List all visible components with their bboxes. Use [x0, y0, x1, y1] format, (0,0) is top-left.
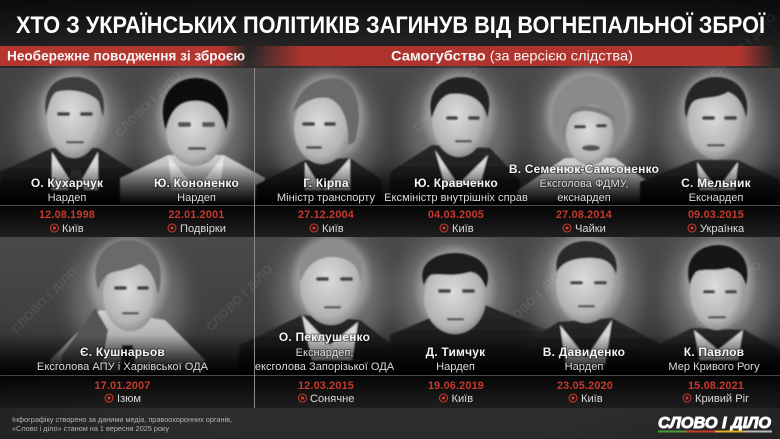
watermarks	[8, 10, 780, 336]
portrait: Г. Кірпа	[256, 70, 382, 205]
card: О. Кухарчук	[31, 176, 104, 235]
card: В. Семенюк-Самсоненко: Ексголова ФДМУ,	[540, 178, 628, 190]
footer background	[0, 408, 780, 439]
portrait: В. Давиденко	[510, 230, 662, 375]
card: В. Семенюк-Самсоненко: 27.08.2014	[556, 209, 612, 221]
footer note: «Слово і діло» станом на 1 вересня 2025 року	[12, 424, 169, 433]
card: О. Кухарчук: Нардеп	[48, 192, 86, 204]
header background	[0, 0, 780, 68]
section heading: Самогубство	[250, 46, 776, 66]
card: Д. Тимчук: 19.06.2019	[428, 380, 484, 392]
card: Ю. Кононенко	[154, 176, 239, 235]
bottom row fade	[0, 335, 780, 375]
footer note	[12, 415, 232, 433]
card: В. Семенюк-Самсоненко: Чайки	[575, 223, 606, 235]
card: Є. Кушнарьов: Ізюм	[117, 393, 141, 405]
watermarks: СЛОВО І ДІЛО	[8, 264, 81, 336]
portrait: В. Семенюк-Самсоненко	[518, 65, 660, 205]
card: К. Павлов: Мер Кривого Рогу	[668, 361, 760, 373]
card: Ю. Кравченко	[384, 176, 528, 235]
card: В. Семенюк-Самсоненко: екснардеп	[557, 192, 611, 204]
panel: top portrait row background	[0, 68, 780, 205]
card: В. Семенюк-Самсоненко: В. Семенюк-Самсоненко	[509, 162, 659, 176]
card: С. Мельник: С. Мельник	[681, 176, 752, 190]
watermarks: СЛОВО І ДІЛО	[707, 10, 780, 82]
card: Д. Тимчук: Д. Тимчук	[426, 345, 486, 359]
card: Ю. Кононенко: Подвірки	[180, 223, 226, 235]
section heading: Необережне поводження зі зброєю: Необережне поводження зі зброєю	[7, 48, 245, 64]
panel: bottom portrait row background	[0, 237, 780, 375]
card: В. Давиденко: Нардеп	[565, 361, 603, 373]
card: Є. Кушнарьов: Ексголова АПУ і Харківської ОДА	[37, 361, 209, 373]
card: С. Мельник	[681, 176, 752, 235]
card: Є. Кушнарьов: 17.01.2007	[94, 380, 151, 392]
card: О. Пеклушенко: 12.03.2015	[298, 380, 354, 392]
card: В. Давиденко: Київ	[581, 393, 603, 405]
card: С. Мельник: Екснардеп	[689, 192, 743, 204]
card: Ю. Кононенко: Нардеп	[177, 192, 216, 204]
watermarks: СЛОВО І ДІЛО	[410, 63, 483, 135]
card: К. Павлов: К. Павлов	[684, 345, 744, 359]
watermarks: СЛОВО І ДІЛО	[692, 258, 765, 330]
portrait: Ю. Кононенко	[120, 68, 265, 205]
card: О. Пеклушенко: Сонячне	[310, 393, 354, 405]
card: Д. Тимчук	[426, 345, 486, 405]
portrait: С. Мельник	[640, 70, 780, 205]
card: О. Кухарчук: Київ	[62, 223, 84, 235]
card: Г. Кірпа: Міністр транспорту	[277, 192, 376, 204]
card: К. Павлов: Кривий Ріг	[695, 393, 749, 405]
logo: Слово і діло: СЛОВО І ДІЛО	[658, 415, 771, 432]
card: Ю. Кравченко: Ю. Кравченко	[414, 176, 498, 190]
card: В. Давиденко	[543, 345, 625, 405]
card: О. Пеклушенко	[255, 330, 395, 405]
date strip: bottom row	[0, 375, 780, 408]
card: Ю. Кравченко: 04.03.2005	[428, 209, 484, 221]
card: К. Павлов	[668, 345, 760, 405]
card: Д. Тимчук: Нардеп	[436, 361, 475, 373]
section heading: Самогубство: Самогубство (за версією слідства)	[391, 48, 633, 64]
card: О. Пеклушенко: О. Пеклушенко	[279, 330, 370, 344]
watermarks: СЛОВО І ДІЛО	[497, 263, 570, 335]
card: Є. Кушнарьов	[37, 345, 209, 405]
card: В. Давиденко: В. Давиденко	[543, 345, 625, 359]
footer note: Інфографіку створено за даними медіа, правоохоронних органів,	[12, 415, 232, 424]
card: Ю. Кравченко: Ексміністр внутрішніх справ	[384, 192, 528, 204]
card: О. Кухарчук: 12.08.1998	[39, 209, 95, 221]
card: Г. Кірпа	[277, 176, 376, 235]
portrait: Ю. Кравченко	[390, 70, 520, 205]
card: Ю. Кравченко: Київ	[452, 223, 474, 235]
watermarks: СЛОВО І ДІЛО	[203, 262, 276, 334]
card: В. Давиденко: 23.05.2020	[557, 380, 613, 392]
date strip: top row	[0, 205, 780, 237]
card: С. Мельник: Українка	[700, 223, 745, 235]
portrait: О. Кухарчук	[0, 68, 133, 205]
watermarks: СЛОВО І ДІЛО	[112, 68, 185, 140]
portrait: Д. Тимчук	[390, 237, 547, 375]
card: Є. Кушнарьов: Є. Кушнарьов	[80, 345, 165, 359]
card: О. Пеклушенко: Екснардеп,	[296, 347, 353, 359]
card: Ю. Кононенко: 22.01.2001	[168, 209, 225, 221]
card: О. Пеклушенко: ексголова Запорізької ОДА	[255, 361, 395, 373]
card: Г. Кірпа: Київ	[322, 223, 344, 235]
card: Г. Кірпа: 27.12.2004	[298, 209, 354, 221]
card: С. Мельник: 09.03.2015	[688, 209, 744, 221]
card: Д. Тимчук: Київ	[452, 393, 473, 405]
card: Ю. Кононенко: Ю. Кононенко	[154, 176, 239, 190]
card: О. Кухарчук: О. Кухарчук	[31, 176, 104, 190]
top row fade	[0, 165, 780, 205]
portrait: О. Пеклушенко	[236, 235, 392, 375]
card: Г. Кірпа: Г. Кірпа	[303, 176, 349, 190]
card: К. Павлов: 15.08.2021	[688, 380, 744, 392]
card: В. Семенюк-Самсоненко	[509, 162, 659, 235]
portrait: Є. Кушнарьов	[50, 237, 205, 375]
portrait: К. Павлов	[632, 235, 780, 375]
